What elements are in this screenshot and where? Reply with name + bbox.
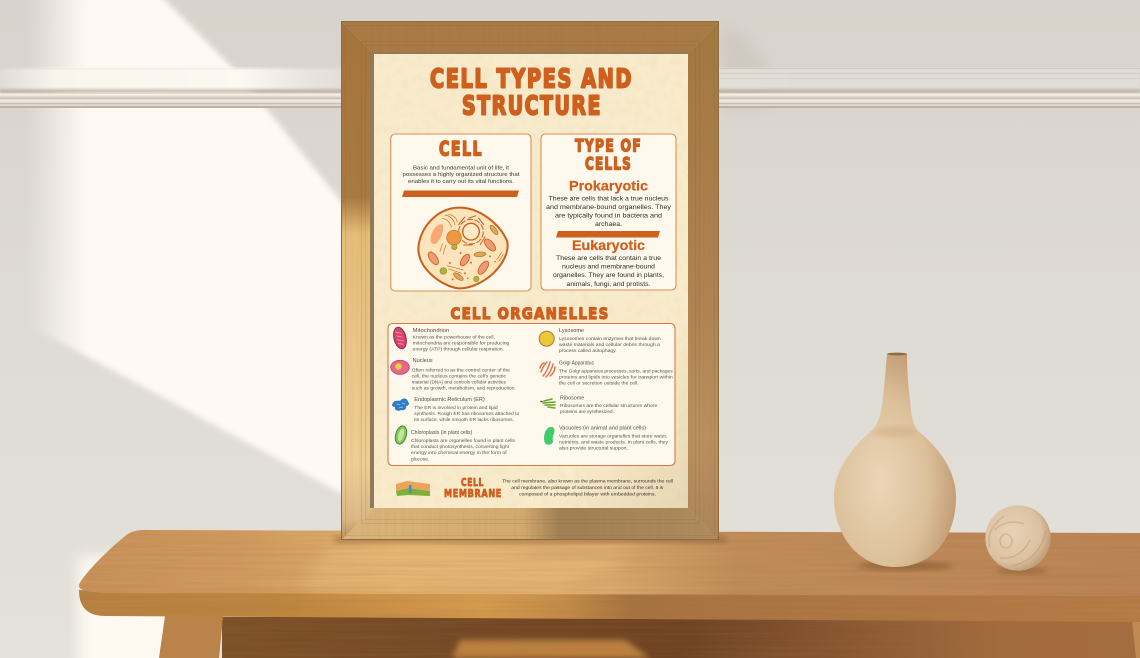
cell description: possesses a highly organized structure that: [402, 172, 520, 178]
heading: cell membrane: CELL: [461, 477, 484, 489]
divider bar: [402, 190, 519, 197]
panel: type of cells: [541, 134, 676, 290]
eukaryotic description: animals, fungi, and protists.: [566, 281, 651, 288]
cell description: Basic and fundamental unit of life, it: [413, 166, 510, 172]
prokaryotic description: are typically found in bacteria and: [555, 213, 662, 220]
title: STRUCTURE: [462, 92, 602, 122]
organelle text: lysosome: Lysosomes contain enzymes that break down: [559, 336, 661, 341]
icon: ribosome: [541, 399, 555, 408]
organelle text: lysosome: waste materials and cellular debris through a: [559, 342, 660, 347]
eukaryotic description: organelles. They are found in plants,: [553, 272, 664, 279]
subheading: eukaryotic: Eukaryotic: [572, 237, 645, 253]
organelle text: endoplasmic reticulum: synthesis. Rough ER has ribosomes attached to: [414, 411, 520, 416]
organelle text: nucleus: Often referred to as the control center of the: [412, 368, 510, 372]
cell description: [402, 166, 520, 185]
organelle text: mitochondrion: Mitochondrion: [413, 328, 449, 334]
heading: type of cells: [574, 138, 640, 170]
organelle text: nucleus: material (DNA) and controls cellular activities: [412, 380, 507, 384]
heading: type of cells: TYPE OF: [575, 136, 642, 156]
poster: [374, 54, 688, 508]
panel: cell organelles: [388, 324, 675, 466]
picture frame: [335, 21, 727, 543]
organelle text: endoplasmic reticulum: Endoplasmic Reticulum (ER): [414, 397, 485, 403]
organelle text: vacuoles: [559, 426, 669, 450]
organelle text: mitochondrion: energy (ATP) through cellular respiration.: [413, 347, 504, 352]
title: CELL TYPES AND: [430, 64, 633, 94]
organelle text: chloroplasts: energy into chemical energy in the form of: [411, 450, 507, 455]
organelle text: golgi apparatus: The Golgi apparatus processes, sorts, and packages: [559, 369, 673, 374]
organelle text: golgi apparatus: Golgi Apparatus: [559, 361, 594, 367]
organelle text: endoplasmic reticulum: [414, 397, 520, 422]
organelle text: golgi apparatus: proteins and lipids into vesicles for transport within: [559, 375, 673, 380]
organelle text: vacuoles: Vacuoles are storage organelles that store water,: [559, 434, 667, 438]
organelle text: chloroplasts: Chloroplasts (in plant cells): [411, 430, 473, 436]
organelle text: golgi apparatus: the cell or secretion outside the cell.: [559, 381, 639, 386]
icon: cell membrane: [396, 481, 430, 496]
icon: vacuole: [544, 427, 555, 445]
cell membrane description: [502, 478, 673, 497]
organelle text: endoplasmic reticulum: The ER is involved in protein and lipid: [414, 405, 498, 410]
heading: cell organelles: CELL ORGANELLES: [450, 304, 610, 323]
organelle text: nucleus: cell, the nucleus contains the cell's genetic: [412, 374, 507, 378]
organelle text: chloroplasts: Chloroplasts are organelles found in plant cells: [411, 438, 516, 443]
heading: type of cells: CELLS: [585, 154, 632, 174]
divider bar: [556, 231, 660, 238]
icon: golgi apparatus: [540, 362, 555, 377]
wooden ball: [985, 505, 1051, 574]
organelle text: vacuoles: nutrients, and waste products. In plant cells, they: [559, 440, 669, 444]
icon: mitochondrion: [393, 326, 407, 350]
organelle text: vacuoles: Vacuoles (in animal and plant cells): [559, 426, 646, 432]
icon: lysosome: [539, 331, 554, 346]
icon: nucleus: [391, 360, 409, 374]
prokaryotic description: These are cells that lack a true nucleus: [548, 195, 668, 202]
cell membrane description: and regulates the passage of substances into and out of the cell. It is: [511, 485, 664, 491]
organelle text: chloroplasts: that conduct photosynthesis, converting light: [411, 444, 510, 449]
wall moulding: [0, 68, 1140, 108]
eukaryotic description: [553, 255, 664, 288]
title: [430, 67, 632, 116]
panel: cell: [391, 134, 531, 291]
organelle text: ribosome: [560, 396, 658, 414]
wooden vase: [834, 353, 956, 570]
organelle text: lysosome: process called autophagy.: [559, 348, 617, 353]
illustration: animal cell: [418, 208, 508, 288]
heading: cell: CELL: [439, 138, 483, 160]
icon: endoplasmic reticulum: [392, 399, 409, 411]
organelle text: endoplasmic reticulum: its surface, while smooth ER lacks ribosomes.: [414, 417, 514, 422]
organelle text: vacuoles: also provide structural support.: [559, 446, 628, 450]
organelle text: mitochondrion: mitochondria are responsible for producing: [413, 341, 510, 346]
organelle text: lysosome: Lysosome: [559, 328, 584, 334]
cell membrane description: composed of a phospholipid bilayer with embedded proteins.: [519, 491, 656, 497]
table: [79, 530, 1140, 658]
organelle text: ribosome: proteins are synthesized.: [560, 409, 614, 414]
organelle text: nucleus: Nucleus: [413, 358, 433, 364]
heading: cell membrane: [444, 478, 502, 498]
organelle text: mitochondrion: Known as the powerhouse of the cell,: [413, 335, 495, 340]
icon: chloroplast: [394, 425, 408, 445]
eukaryotic description: These are cells that contain a true: [556, 255, 661, 262]
cell description: enables it to carry out its vital functions.: [408, 179, 514, 185]
organelle text: golgi apparatus: [559, 361, 673, 386]
cell membrane description: The cell membrane, also known as the plasma membrane, surrounds the cell: [502, 478, 673, 484]
organelle text: nucleus: [412, 358, 516, 390]
organelle text: chloroplasts: glucose.: [411, 456, 429, 462]
organelle text: ribosome: Ribosomes are the cellular structures where: [560, 403, 658, 408]
organelle text: ribosome: Ribosome: [560, 396, 584, 402]
organelle text: nucleus: such as growth, metabolism, and reproduction.: [412, 386, 516, 390]
prokaryotic description: and membrane-bound organelles. They: [546, 204, 672, 211]
organelle text: lysosome: [559, 328, 661, 353]
prokaryotic description: archaea.: [595, 221, 622, 228]
organelle text: mitochondrion: [413, 328, 510, 352]
subheading: prokaryotic: Prokaryotic: [569, 178, 648, 194]
organelle text: chloroplasts: [411, 430, 516, 462]
heading: cell membrane: MEMBRANE: [444, 488, 502, 500]
eukaryotic description: nucleus and membrane-bound: [562, 264, 655, 271]
prokaryotic description: [546, 195, 672, 228]
